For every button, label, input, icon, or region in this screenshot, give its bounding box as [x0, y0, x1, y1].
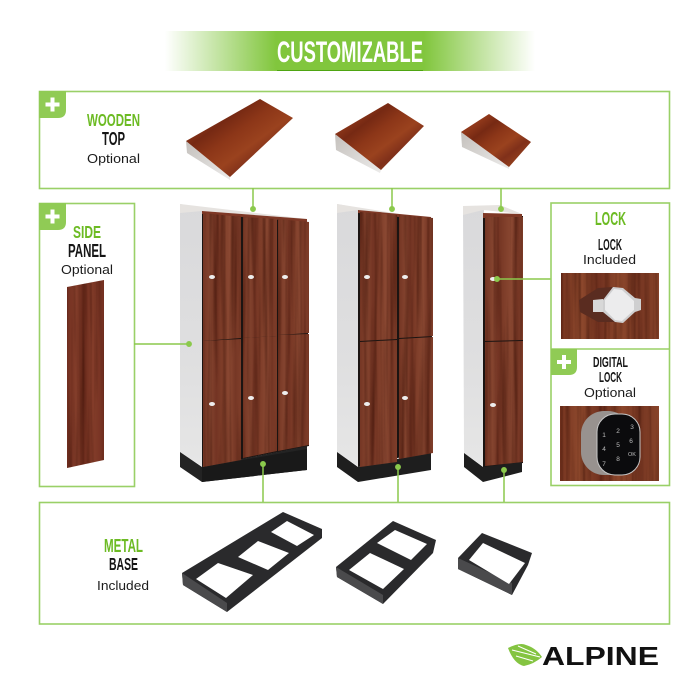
photo: digital lock: 1 [602, 432, 606, 439]
heading: metal base: BASE [109, 554, 138, 574]
locker: one column [463, 205, 523, 482]
photo: digital lock [560, 406, 659, 481]
panel: lock [551, 203, 670, 486]
photo: digital lock: 7 [602, 461, 606, 468]
heading: side panel: SIDE [73, 222, 101, 242]
heading: side panel: PANEL [68, 241, 106, 261]
wooden top small [461, 114, 531, 169]
icon: plus tab side panel [39, 203, 66, 230]
heading: metal base: METAL [104, 536, 143, 556]
title banner [165, 31, 535, 71]
locker: two column [337, 204, 433, 482]
panel: wooden top [39, 91, 670, 188]
photo: digital lock: 4 [602, 446, 606, 453]
logo: alpine: ALPINE [542, 641, 659, 671]
heading: lock included: LOCK [598, 237, 622, 254]
heading: wooden top [87, 110, 140, 166]
wooden top medium [335, 103, 424, 173]
heading: digital lock: LOCK [599, 369, 622, 386]
panel: metal base [40, 502, 670, 624]
side panel board [67, 280, 104, 468]
photo: digital lock: 8 [616, 456, 620, 463]
heading: lock included [583, 208, 636, 267]
metal base small [458, 533, 532, 595]
photo: lock knob [561, 273, 659, 339]
metal base medium [336, 521, 436, 604]
heading: metal base: Included [97, 578, 149, 593]
icon: plus tab wooden top [39, 91, 66, 118]
heading: wooden top: TOP [102, 129, 125, 149]
photo: digital lock: 6 [629, 438, 633, 445]
heading: lock included: LOCK [595, 208, 626, 229]
logo: alpine [508, 641, 659, 671]
icon: leaf [508, 644, 542, 666]
wooden top large [186, 99, 293, 180]
photo: digital lock: 3 [630, 424, 634, 431]
heading: side panel: Optional [61, 262, 113, 277]
photo: digital lock: 5 [616, 442, 620, 449]
connector lines [134, 188, 551, 502]
heading: side panel [61, 222, 113, 277]
photo: digital lock: OK [628, 452, 636, 458]
panel: side panel [39, 203, 134, 486]
heading: digital lock: Optional [584, 385, 636, 400]
heading: wooden top: Optional [87, 151, 140, 166]
heading: metal base [97, 536, 149, 593]
heading: wooden top: WOODEN [87, 110, 140, 130]
photo: digital lock: 2 [616, 428, 620, 435]
title banner: CUSTOMIZABLE [277, 36, 423, 69]
metal base large [182, 512, 322, 612]
heading: lock included: Included [583, 252, 636, 267]
heading: digital lock: DIGITAL [593, 354, 628, 371]
heading: digital lock [584, 354, 636, 400]
icon: plus tab digital lock [551, 349, 577, 375]
locker: three column [180, 204, 309, 482]
